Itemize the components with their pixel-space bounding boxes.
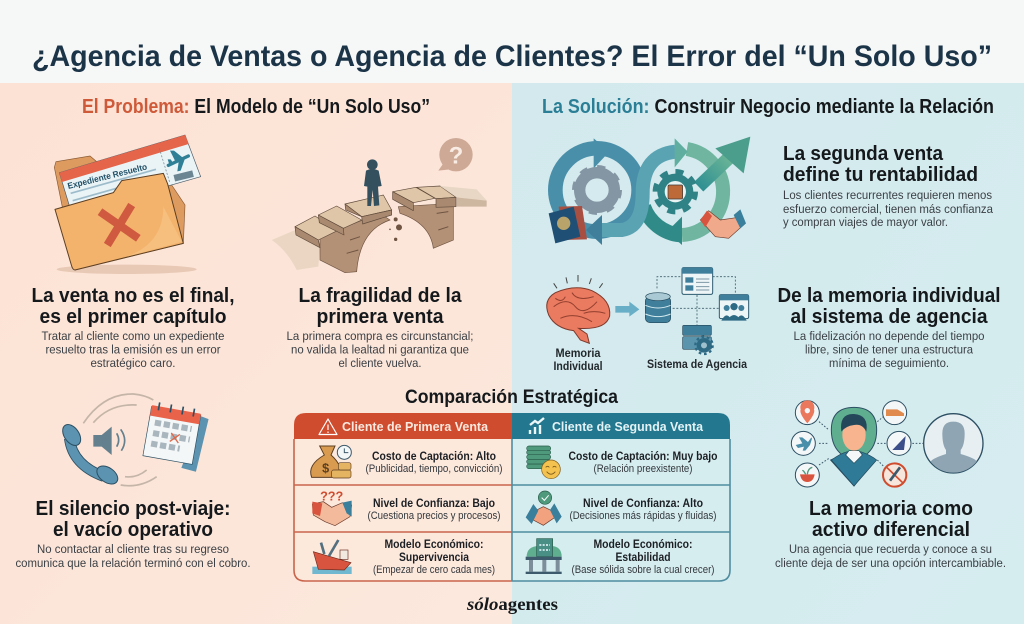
server [683,325,713,354]
text block: La fragilidad [286,285,474,370]
icon: doubtful handshake [312,490,352,526]
shoes circle [883,401,907,425]
prohibited circle [883,463,906,487]
question bubble: ? [449,142,463,169]
row text: confianza alta [570,496,717,522]
text block: De la memoria individual [778,285,1000,370]
text block: El silencio post-viaje [16,498,250,570]
row text: estabilidad: Estabilidad [616,550,670,564]
text block: La venta no es el final [32,285,234,370]
heading: Comparación Estratégica: Comparación Estratégica [405,387,618,408]
text block: El silencio post-viaje: el vacío operativo [53,519,213,541]
person [364,159,382,206]
heading: La Solución: La Solución: Construir Negocio mediante la Relación [542,96,994,118]
row text: supervivencia: Modelo Económico: [384,537,484,551]
window [682,268,713,294]
text block: La fragilidad: La fragilidad de la [298,285,462,307]
header text: Cliente de Primera Venta [342,419,489,434]
bridge stones right [393,186,487,211]
text block: De la memoria individual: De la memoria individual [778,285,1000,307]
calendar [142,401,210,472]
text block: La fragilidad: primera venta [316,306,444,328]
icon: folder with ticket [54,135,201,274]
handshake [700,209,746,238]
label: Memoria Individual: Individual [554,359,602,373]
icon: folder with ticket: Expediente Resuelto [66,161,148,191]
question bubble [438,138,473,171]
icon: brain to agency system [547,268,749,354]
label: Sistema de Agencia: Sistema de Agencia [647,357,747,371]
text block: La fragilidad: La primera compra es circunstancial; [286,329,474,343]
database [645,297,671,323]
text block: La venta no es el final: La venta no es el final, [32,285,234,307]
row text: supervivencia: Supervivencia [399,550,469,564]
row text: costo alto: (Publicidad, tiempo, convicción) [366,463,503,475]
header text: Cliente de Segunda Venta [552,419,704,434]
text block: De la memoria individual: libre, sino de tener una estructura [805,342,973,356]
text block: La venta no es el final: resuelto tras la emisión es un error [46,342,220,356]
label: Memoria Individual [554,346,602,373]
bridge stones left [295,195,392,248]
heading: El Problema: El Problema: El Modelo de “Un Solo Uso” [82,96,430,118]
arrow [615,302,639,317]
icon: doubtful handshake: ??? [320,490,343,504]
text block: La memoria como activo: La memoria como [809,498,973,520]
row text: supervivencia: (Empezar de cero cada mes) [373,564,495,576]
row text: confianza alta: Nivel de Confianza: Alto [583,496,703,510]
text block: La memoria como activo: Una agencia que recuerda y conoce a su [789,542,992,556]
table: right column [512,413,730,581]
icon: coins and smile [527,446,560,479]
row text: estabilidad: Modelo Económico: [594,537,692,551]
dashed connectors [657,277,735,325]
text block: La memoria como activo [775,498,1006,570]
text block: La segunda venta [783,143,993,229]
icon: building on pillars [526,539,562,574]
text block: La segunda venta: Los clientes recurrentes requieren menos [783,188,992,202]
panel: right background [512,83,1024,624]
text block: La fragilidad: no valida la lealtad ni garantiza que [291,342,469,356]
text block: La venta no es el final: es el primer capítulo [40,306,226,328]
central person [831,407,877,486]
text block: De la memoria individual: La fidelización no depende del tiempo [794,329,985,343]
row text: costo muy bajo: Costo de Captación: Muy bajo [568,449,718,463]
row text: confianza alta: (Decisiones más rápidas y fluidas) [570,510,717,522]
row text: supervivencia [373,537,495,576]
brain [547,275,610,343]
table: left column [294,413,512,581]
text block: El silencio post-viaje: El silencio post-viaje: [36,498,230,520]
plane circle [791,431,815,455]
title band [0,0,1024,83]
comparison table [294,413,730,581]
text block: La segunda venta: define tu rentabilidad [783,164,978,186]
text block: La segunda venta: La segunda venta [783,143,944,165]
logo: sóloagentes [466,594,558,614]
airline tail circle [887,431,911,455]
text block: La segunda venta: y compran viajes de mayor valor. [783,215,948,229]
text block: La venta no es el final: estratégico caro. [90,356,176,370]
icon: phone and calendar [59,394,210,488]
growth icon [530,418,544,434]
pin circle [795,400,819,425]
row text: confianza baja: (Cuestiona precios y procesos) [368,510,501,522]
label: Memoria Individual: Memoria [556,346,601,360]
text block: El silencio post-viaje: comunica que la relación terminó con el cobro. [16,556,250,570]
icon: money bag and clock [311,445,351,478]
users window [719,295,749,321]
text block: La venta no es el final: Tratar al cliente como un expediente [42,329,225,343]
text block: De la memoria individual: mínima de seguimiento. [829,356,949,370]
text block: La memoria como activo: cliente deja de ser una opción intercambiable. [775,556,1006,570]
row text: costo alto: Costo de Captación: Alto [372,449,496,463]
row text: costo muy bajo [568,449,718,475]
silhouette [924,414,983,473]
text block: De la memoria individual: al sistema de agencia [790,306,988,328]
icon: trust handshake [526,491,562,525]
text block: La memoria como activo: activo diferencial [812,519,970,541]
text block: La fragilidad: el cliente vuelva. [338,356,422,370]
warning icon [319,419,337,434]
row text: estabilidad: (Base sólida sobre la cual crecer) [572,564,715,576]
text block: La segunda venta: esfuerzo comercial, tienen más confianza [783,202,993,216]
icon: sinking ship [312,540,352,574]
row text: confianza baja [368,496,501,522]
icon: money bag and clock: $ [322,462,329,476]
title: ¿Agencia de Ventas o Agencia de Clientes? El Error del “Un Solo Uso” [32,40,992,73]
icon: customer memory network [791,400,983,487]
panel: left background [0,83,512,624]
passports [549,206,587,243]
text block: El silencio post-viaje: No contactar al cliente tras su regreso [37,542,229,556]
icon: growth loop [549,137,750,245]
row text: confianza baja: Nivel de Confianza: Bajo [373,496,495,510]
row text: estabilidad [572,537,715,576]
row text: costo muy bajo: (Relación preexistente) [594,463,693,475]
food circle [795,463,819,487]
row text: costo alto [366,449,503,475]
icon: broken bridge [272,138,487,273]
